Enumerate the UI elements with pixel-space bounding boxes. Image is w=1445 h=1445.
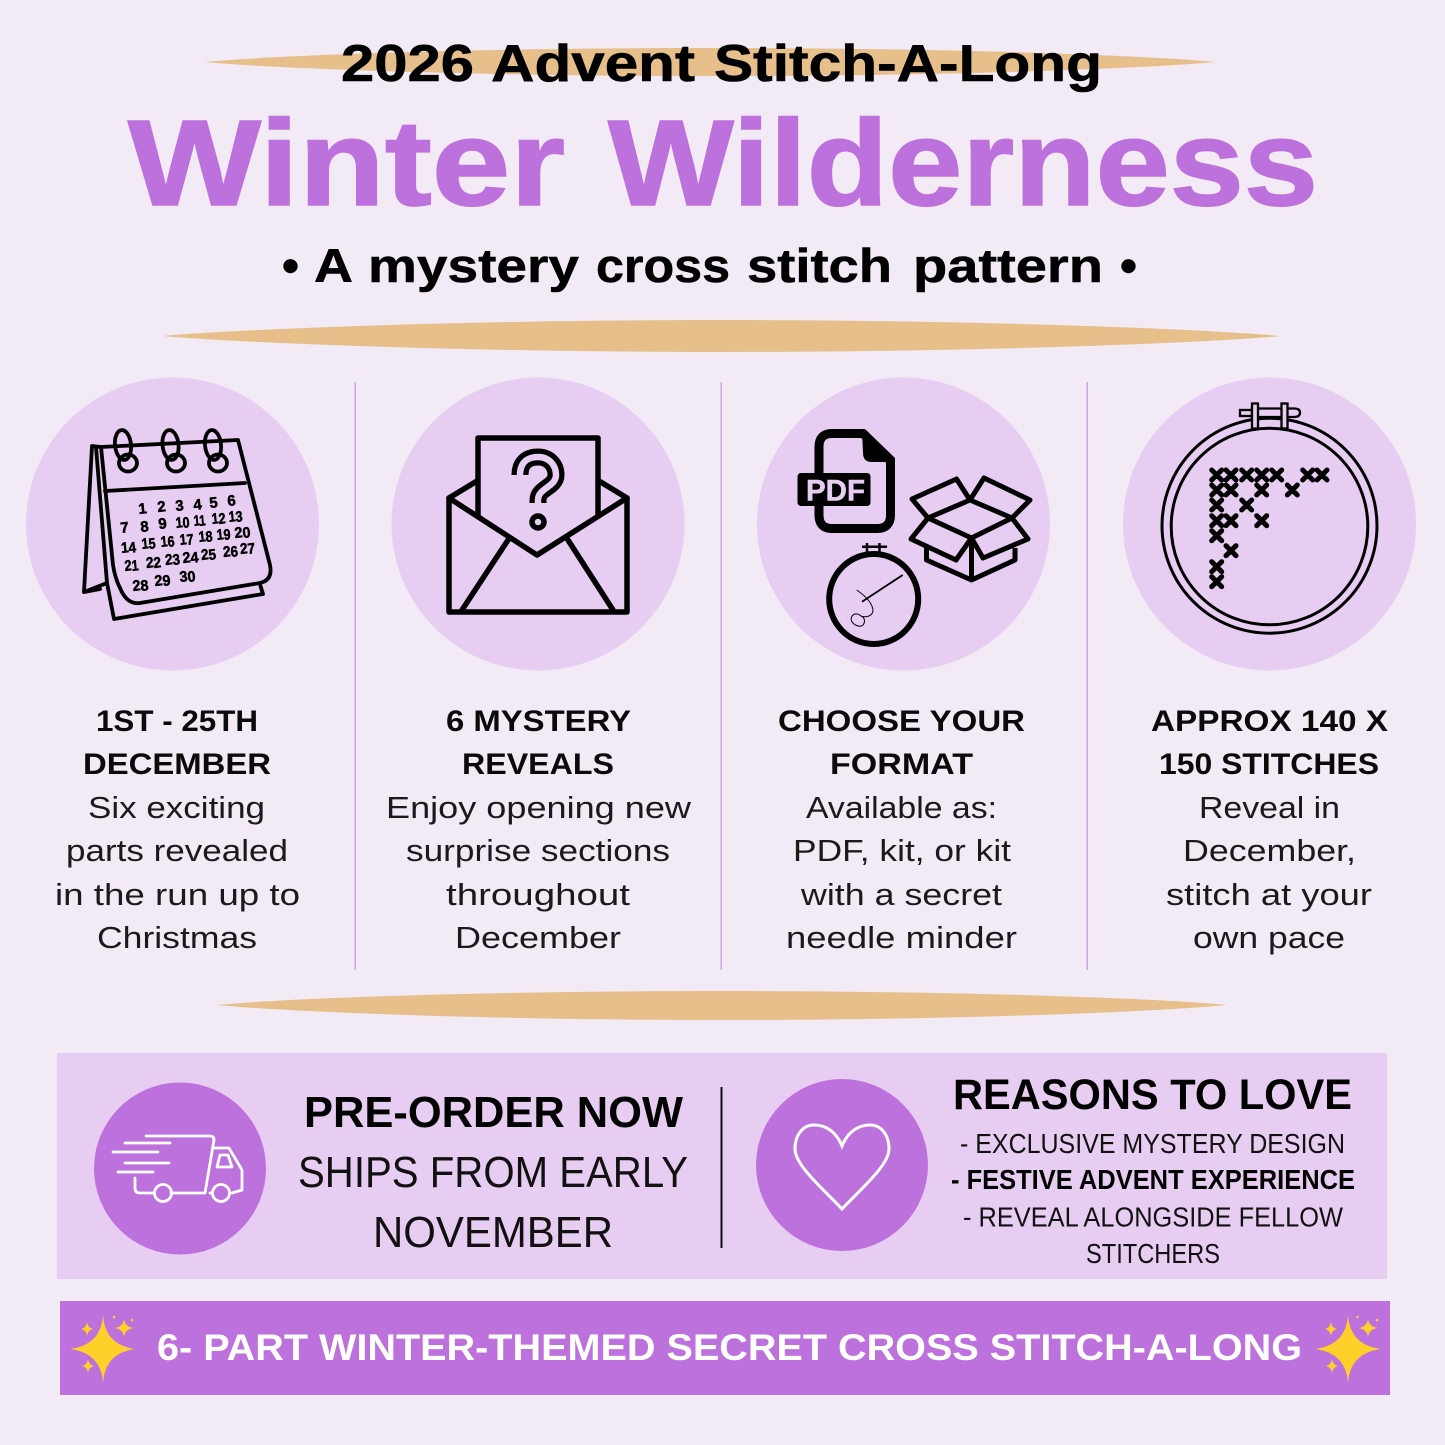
icon: calendar: 8	[139, 518, 150, 536]
column divider 2	[720, 382, 722, 970]
icon: calendar: 5	[208, 494, 219, 512]
text block: pre-order now	[298, 1088, 688, 1257]
icon: calendar: 25	[200, 546, 217, 564]
text block: reasons to love: - REVEAL ALONGSIDE FELLOW	[963, 1202, 1344, 1232]
heading: 2026 Advent Stitch-A-Long: Stitch-A-Long	[714, 35, 1102, 93]
icon: heart	[756, 1079, 928, 1251]
title: Winter Wilderness: Wilderness	[608, 95, 1318, 231]
text block: 6 mystery reveals: throughout	[446, 878, 631, 912]
text block: choose your format: Available as:	[806, 791, 997, 825]
text block: 1st - 25th December: Christmas	[97, 921, 257, 955]
brush stroke under header	[163, 320, 1281, 352]
banner: 6-part secret cross stitch-a-long	[60, 1301, 1390, 1395]
icon: calendar: 19	[216, 526, 231, 544]
text block: choose your format: PDF, kit, or kit	[793, 834, 1012, 868]
subtitle: •	[1120, 239, 1137, 292]
icon: calendar: 4	[192, 496, 203, 514]
text block: reasons to love: - EXCLUSIVE MYSTERY DESIGN	[960, 1128, 1345, 1159]
icon: calendar: 29	[154, 572, 171, 590]
heading: 2026 Advent Stitch-A-Long: Advent	[491, 35, 695, 93]
subtitle: stitch	[747, 239, 892, 292]
subtitle	[282, 239, 1137, 292]
icon: calendar: 26	[222, 543, 239, 561]
icon: calendar: 24	[182, 549, 200, 567]
subtitle: •	[282, 239, 299, 292]
icon: calendar: 16	[160, 533, 175, 551]
icon: PDF document	[798, 430, 895, 528]
title: Winter Wilderness: Winter	[128, 95, 565, 231]
column divider 3	[1086, 382, 1088, 970]
heading: 2026 Advent Stitch-A-Long: 2026	[341, 35, 474, 93]
text block: approx 140 x 150 stitches: stitch at your	[1166, 878, 1372, 912]
panel: pre-order and reasons to love	[57, 1053, 1387, 1279]
icon: sparkles right	[1315, 1315, 1381, 1383]
text block: reasons to love	[951, 1071, 1355, 1269]
icon: calendar: 17	[179, 531, 194, 549]
text block: approx 140 x 150 stitches	[1151, 705, 1388, 955]
icon: delivery truck	[94, 1082, 266, 1254]
text block: 1st - 25th December: in the run up to	[55, 878, 300, 912]
icon: calendar	[26, 378, 319, 670]
text block: approx 140 x 150 stitches: APPROX 140 X	[1151, 705, 1388, 738]
icon: calendar: 27	[239, 540, 256, 558]
text block: reasons to love: REASONS TO LOVE	[953, 1071, 1352, 1119]
text block: 6 mystery reveals: REVEALS	[462, 748, 614, 781]
text block: choose your format	[778, 705, 1025, 955]
subtitle: mystery	[368, 239, 579, 292]
text block: 6 mystery reveals: Enjoy opening new	[386, 791, 692, 825]
subtitle: cross	[596, 239, 730, 292]
icon: PDF, box and hoop formats	[757, 378, 1050, 670]
icon: calendar: 1	[137, 500, 148, 518]
icon: calendar: 14	[120, 539, 137, 557]
icon: calendar: 2	[156, 498, 167, 516]
column divider 1	[354, 382, 356, 970]
icon: calendar: 13	[228, 508, 243, 526]
text block: choose your format: CHOOSE YOUR	[778, 705, 1025, 738]
text block: approx 140 x 150 stitches: 150 STITCHES	[1159, 748, 1379, 781]
text block: approx 140 x 150 stitches: Reveal in	[1199, 791, 1340, 825]
text block: reasons to love: STITCHERS	[1086, 1238, 1220, 1269]
icon: calendar: 12	[211, 510, 226, 528]
icon: calendar: 11	[193, 512, 206, 530]
text block: choose your format: needle minder	[786, 921, 1017, 955]
top decorative brush stroke	[205, 48, 1215, 76]
icon: calendar: 6	[226, 492, 237, 510]
text block: choose your format: with a secret	[800, 878, 1003, 912]
icon: embroidery hoop with cross stitches	[1123, 378, 1416, 670]
icon: calendar: 7	[119, 519, 130, 537]
icon: calendar: 23	[164, 551, 181, 569]
icon: open box	[911, 478, 1030, 580]
icon: calendar: 9	[157, 515, 168, 533]
icon: sparkles left	[70, 1315, 135, 1383]
brush stroke above lower panel	[217, 991, 1227, 1020]
icon: calendar: 28	[132, 577, 149, 595]
title: Winter Wilderness	[128, 95, 1318, 231]
icon: calendar: 22	[145, 554, 162, 572]
icon: calendar: 30	[179, 568, 196, 586]
text block: 6 mystery reveals: surprise sections	[406, 834, 670, 868]
icon: calendar: 15	[141, 535, 156, 553]
icon: calendar: 10	[175, 514, 190, 532]
text block: pre-order now: SHIPS FROM EARLY	[298, 1148, 688, 1197]
text block: 1st - 25th December	[55, 705, 300, 955]
subtitle: A	[314, 239, 353, 292]
icon: calendar: 20	[234, 524, 251, 542]
text block: pre-order now: NOVEMBER	[373, 1208, 613, 1257]
icon: calendar: 18	[198, 528, 213, 546]
banner: 6-part secret cross stitch-a-long: 6- PART WINTER-THEMED SECRET CROSS STITCH-A-LONG	[157, 1326, 1302, 1368]
text block: 6 mystery reveals	[386, 705, 692, 955]
text block: 1st - 25th December: Six exciting	[88, 791, 265, 825]
icon: PDF document: PDF	[806, 474, 865, 508]
subtitle: pattern	[913, 239, 1103, 292]
icon: small hoop with needle	[829, 543, 918, 644]
text block: approx 140 x 150 stitches: own pace	[1193, 921, 1345, 955]
text block: 1st - 25th December: 1ST - 25TH	[96, 705, 258, 738]
icon: envelope with question mark	[392, 378, 684, 670]
text block: 6 mystery reveals: December	[455, 921, 621, 955]
text block: pre-order now: PRE-ORDER NOW	[304, 1088, 683, 1137]
text block: reasons to love: - FESTIVE ADVENT EXPERIENCE	[951, 1164, 1355, 1195]
text block: choose your format: FORMAT	[830, 748, 973, 781]
heading: 2026 Advent Stitch-A-Long	[341, 35, 1102, 93]
text block: approx 140 x 150 stitches: December,	[1183, 834, 1356, 868]
icon: calendar: 3	[174, 497, 185, 515]
text block: 1st - 25th December: parts revealed	[66, 834, 288, 868]
icon: calendar: 21	[124, 557, 139, 575]
text block: 6 mystery reveals: 6 MYSTERY	[446, 705, 631, 738]
text block: 1st - 25th December: DECEMBER	[83, 748, 271, 781]
